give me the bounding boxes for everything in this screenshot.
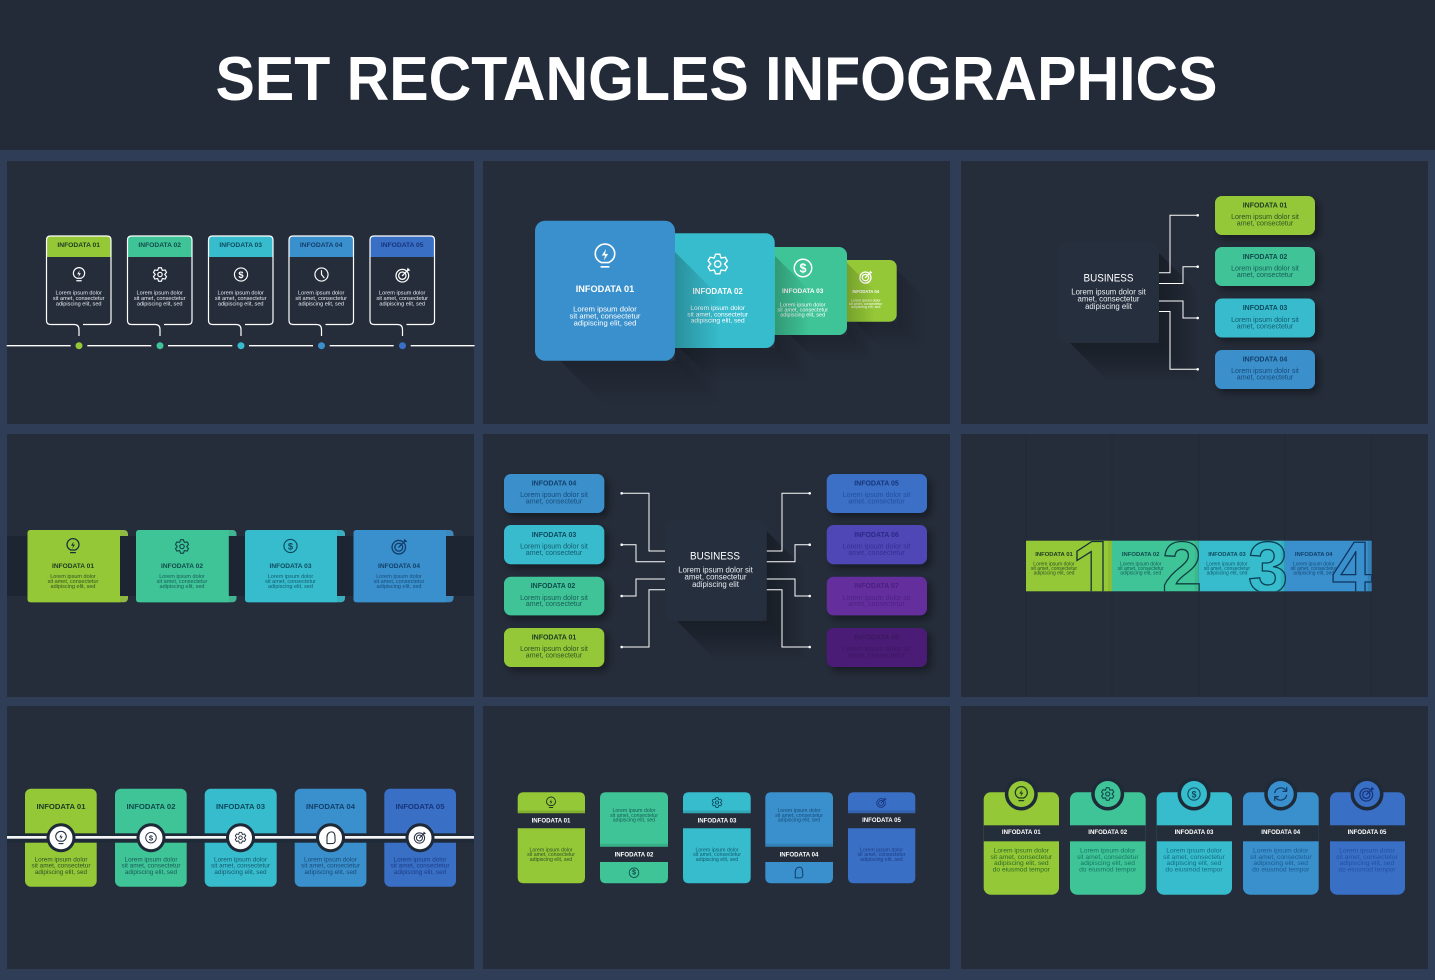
item 04 [504, 474, 604, 513]
square 04: adipiscing elit, sed [851, 305, 880, 309]
square 03: INFODATA 03 [782, 288, 824, 295]
item 06 [827, 525, 927, 564]
segment 3: INFODATA 03 [1208, 552, 1246, 558]
card 03: sit amet, consectetur [215, 296, 267, 302]
item 03: INFODATA 03 [532, 532, 576, 539]
item 01: INFODATA 01 [1243, 202, 1287, 210]
shadow of business box [1070, 253, 1199, 383]
card 04: adipiscing elit, sed [304, 869, 357, 876]
square 03: Lorem ipsum dolor [780, 303, 826, 309]
square 04: INFODATA 04 [852, 289, 880, 294]
card 05 [384, 789, 456, 887]
shadow of teal square [791, 263, 870, 342]
card 02 [1070, 778, 1146, 895]
square 04 [847, 260, 897, 322]
card 03: Lorem ipsum dolor [214, 856, 268, 864]
outlined numerals [1076, 540, 1372, 592]
card 01 [46, 236, 111, 349]
card 02: INFODATA 02 [161, 563, 203, 570]
card 01 [518, 792, 585, 883]
segment 4 [1285, 541, 1372, 591]
item 01 [1215, 196, 1315, 235]
card 03: sit amet, consectetur [693, 852, 741, 858]
card 03: sit amet, consectetur [265, 579, 316, 585]
segment 2: sit amet, consectetur [1118, 566, 1164, 572]
card 01: adipiscing elit, sed [994, 860, 1049, 867]
card 02 [136, 530, 238, 602]
card 04: adipiscing elit, sed [778, 818, 820, 824]
card 01 [28, 530, 129, 602]
item 04: amet, consectetur [526, 498, 583, 506]
shadow of cyan square [682, 256, 804, 359]
business box: Lorem ipsum dolor sit [678, 566, 754, 574]
segment 3: Lorem ipsum dolor [1206, 561, 1248, 567]
item 05 [827, 474, 927, 513]
card 03: Lorem ipsum dolor [268, 574, 313, 580]
square 03: adipiscing elit, sed [780, 313, 825, 319]
card 01: Lorem ipsum dolor [530, 848, 573, 854]
panel: descending stacked squares [483, 161, 950, 424]
business box: Lorem ipsum dolor sit [1071, 288, 1147, 296]
card 03: INFODATA 03 [1175, 829, 1214, 836]
card 02: adipiscing elit, sed [137, 301, 183, 307]
card 02: do eiusmod tempor [1079, 866, 1137, 874]
square 04: Lorem ipsum dolor [851, 298, 881, 302]
square 02: INFODATA 02 [693, 287, 743, 296]
shadow of business box [677, 531, 807, 661]
card 04: do eiusmod tempor [1252, 866, 1310, 874]
card 03: adipiscing elit, sed [696, 857, 738, 863]
card 05 [848, 792, 915, 883]
square 04: sit amet, consectetur [849, 302, 883, 306]
card 02: sit amet, consectetur [122, 862, 181, 870]
item 02: amet, consectetur [526, 600, 583, 608]
card 03: adipiscing elit, sed [268, 584, 313, 590]
segment 2: Lorem ipsum dolor [1120, 561, 1162, 567]
card 01: Lorem ipsum dolor [35, 856, 88, 864]
segment 1: sit amet, consectetur [1031, 566, 1077, 572]
segment 2: adipiscing elit, sed [1120, 571, 1161, 577]
square 03: sit amet, consectetur [777, 308, 828, 314]
card 01: Lorem ipsum dolor [56, 291, 102, 297]
item 02 [504, 577, 604, 615]
item 07: amet, consectetur [848, 600, 905, 608]
shadow of blue square [560, 252, 714, 378]
item 05: amet, consectetur [848, 498, 905, 506]
card 05: sit amet, consectetur [391, 862, 450, 870]
outlined numerals: 3 [1248, 528, 1288, 608]
panel: numbered strip [961, 434, 1428, 697]
card 02: Lorem ipsum dolor [159, 574, 205, 580]
card 04: sit amet, consectetur [775, 813, 823, 819]
panel: folded cards on band [7, 434, 474, 697]
square 01: adipiscing elit, sed [574, 318, 636, 328]
card 05: sit amet, consectetur [1336, 854, 1399, 861]
business box: amet, consectetur [1078, 294, 1140, 304]
title banner [0, 0, 1435, 150]
card 03: do eiusmod tempor [1165, 866, 1223, 874]
panel: business tree with eight items [483, 434, 950, 697]
card 02: INFODATA 02 [615, 852, 654, 858]
segment 4: Lorem ipsum dolor [1293, 561, 1335, 567]
item 05: Lorem ipsum dolor sit [843, 491, 910, 499]
item 01 [504, 628, 604, 667]
card 05: adipiscing elit, sed [379, 301, 425, 307]
title: SET RECTANGLES INFOGRAPHICS [216, 45, 1218, 114]
card 01: sit amet, consectetur [53, 296, 105, 302]
dark band [7, 536, 474, 596]
card 02 [128, 236, 192, 349]
item 02: amet, consectetur [1237, 271, 1294, 279]
card 04: INFODATA 04 [780, 852, 819, 858]
card 01: INFODATA 01 [37, 802, 86, 811]
card 01: adipiscing elit, sed [530, 857, 572, 863]
item 06: Lorem ipsum dolor sit [843, 542, 910, 550]
card 02: Lorem ipsum dolor [613, 808, 656, 814]
card 02: Lorem ipsum dolor [125, 856, 178, 864]
card 03 [245, 530, 346, 602]
card 01: sit amet, consectetur [527, 852, 575, 858]
item 01: INFODATA 01 [532, 634, 576, 642]
card 04 [295, 789, 366, 887]
business box: adipiscing elit [692, 580, 740, 589]
item 04: INFODATA 04 [1243, 356, 1287, 364]
item 03: INFODATA 03 [1243, 305, 1287, 312]
segment 4: adipiscing elit, sed [1293, 571, 1334, 577]
item 03: amet, consectetur [526, 549, 583, 557]
card 02: adipiscing elit, sed [125, 869, 178, 876]
card 03 [205, 789, 277, 887]
card 05: INFODATA 05 [862, 817, 902, 824]
dark band and white line [7, 833, 474, 843]
square 03 [774, 247, 847, 335]
square 01 [535, 221, 675, 361]
item 06: amet, consectetur [848, 549, 905, 557]
card 04: sit amet, consectetur [374, 579, 425, 585]
card 01: adipiscing elit, sed [51, 584, 95, 590]
business box: adipiscing elit [1085, 302, 1133, 311]
card 02: adipiscing elit, sed [1080, 860, 1135, 867]
business box [665, 520, 767, 621]
item 03 [1215, 298, 1315, 338]
card 04: Lorem ipsum dolor [304, 856, 358, 864]
segment 1: adipiscing elit, sed [1034, 571, 1075, 577]
card 05: sit amet, consectetur [376, 296, 428, 302]
card 04: INFODATA 04 [306, 802, 356, 811]
card 04 [765, 792, 833, 883]
card 05 [1330, 778, 1405, 895]
card 05 [370, 236, 434, 349]
card 02: sit amet, consectetur [134, 296, 186, 302]
node 3 [226, 823, 255, 852]
item 06: INFODATA 06 [854, 532, 899, 539]
card 03 [1157, 778, 1232, 895]
card 05: Lorem ipsum dolor [860, 848, 903, 854]
business box: BUSINESS [1084, 272, 1134, 284]
card 05: sit amet, consectetur [858, 852, 906, 858]
card 02: Lorem ipsum dolor [137, 291, 183, 297]
card 03 [683, 792, 751, 883]
node 5 [406, 823, 434, 852]
item 08 [827, 628, 927, 667]
item 04 [1215, 350, 1315, 389]
card 01: do eiusmod tempor [993, 866, 1051, 874]
card 03: adipiscing elit, sed [1167, 860, 1222, 867]
segment 3: adipiscing elit, sed [1207, 571, 1248, 577]
shadow of green square [861, 270, 900, 324]
segment 2 [1112, 541, 1199, 591]
card 02: INFODATA 02 [127, 802, 175, 811]
segment 1: Lorem ipsum dolor [1033, 561, 1075, 567]
square 01: sit amet, consectetur [570, 312, 641, 320]
card 01 [984, 778, 1059, 895]
card 02: INFODATA 02 [1088, 829, 1128, 836]
card 02: sit amet, consectetur [610, 813, 658, 819]
card 01: Lorem ipsum dolor [50, 574, 96, 580]
card 03: Lorem ipsum dolor [1166, 848, 1222, 854]
card 04: INFODATA 04 [300, 242, 343, 249]
card 04: sit amet, consectetur [301, 862, 361, 870]
card 04: Lorem ipsum dolor [376, 574, 422, 580]
square 01: Lorem ipsum dolor [573, 304, 637, 314]
item 03: Lorem ipsum dolor sit [520, 542, 588, 550]
item 03: Lorem ipsum dolor sit [1231, 316, 1299, 324]
item 01: amet, consectetur [1237, 220, 1294, 228]
card 05: INFODATA 05 [1348, 829, 1387, 836]
panel: cards with round icon badges [961, 706, 1428, 969]
item 04: Lorem ipsum dolor sit [520, 491, 588, 499]
card 04 [289, 236, 354, 349]
item 02: Lorem ipsum dolor sit [520, 594, 588, 602]
card 02: INFODATA 02 [138, 242, 181, 249]
card 01: adipiscing elit, sed [56, 301, 102, 307]
item 03: amet, consectetur [1237, 322, 1294, 330]
card 02: adipiscing elit, sed [160, 584, 204, 590]
card 04: INFODATA 04 [378, 563, 420, 570]
card 03 [208, 236, 273, 349]
panel: cards crossed by line [7, 706, 474, 969]
card 03: INFODATA 03 [219, 242, 262, 249]
card 03: adipiscing elit, sed [218, 301, 264, 307]
card 04: Lorem ipsum dolor [778, 808, 821, 814]
square 01: INFODATA 01 [576, 284, 634, 294]
card 01 [25, 789, 97, 887]
item 01: Lorem ipsum dolor sit [520, 645, 588, 653]
outlined numerals: 2 [1162, 528, 1202, 608]
item 03 [504, 525, 604, 564]
square 02: Lorem ipsum dolor [690, 305, 746, 312]
card 03: Lorem ipsum dolor [218, 291, 264, 297]
card 01: sit amet, consectetur [48, 579, 99, 585]
card 05: INFODATA 05 [396, 802, 445, 811]
square 02 [675, 233, 775, 348]
card 01: INFODATA 01 [52, 563, 94, 570]
card 05: adipiscing elit, sed [860, 857, 903, 863]
card 02: sit amet, consectetur [157, 579, 208, 585]
card 04: adipiscing elit, sed [377, 584, 421, 590]
card 03: INFODATA 03 [216, 802, 265, 811]
card 03: adipiscing elit, sed [214, 869, 267, 876]
node 1 [46, 823, 76, 852]
panel: business tree with four items [961, 161, 1428, 424]
card 02: adipiscing elit, sed [613, 818, 655, 824]
panel: outlined cards on timeline [7, 161, 474, 424]
item 01: amet, consectetur [526, 652, 583, 660]
item 02: INFODATA 02 [531, 583, 575, 590]
item 04: Lorem ipsum dolor sit [1231, 367, 1299, 375]
connector lines [620, 492, 811, 648]
card 01: sit amet, consectetur [990, 854, 1053, 861]
segment 3: sit amet, consectetur [1204, 566, 1250, 572]
card 04: INFODATA 04 [1261, 829, 1301, 836]
card 05: Lorem ipsum dolor [379, 291, 425, 297]
card 01: sit amet, consectetur [32, 862, 91, 870]
card 02: Lorem ipsum dolor [1080, 848, 1136, 854]
card 05: do eiusmod tempor [1338, 866, 1396, 874]
card 04: sit amet, consectetur [1250, 854, 1312, 861]
card 04: Lorem ipsum dolor [298, 291, 344, 297]
item 07: Lorem ipsum dolor sit [843, 594, 910, 602]
panel: split cards [483, 706, 950, 969]
segment 1: INFODATA 01 [1035, 552, 1073, 558]
item 01: Lorem ipsum dolor sit [1231, 213, 1299, 221]
card 03: sit amet, consectetur [1163, 854, 1226, 861]
segment 4: INFODATA 04 [1295, 552, 1333, 558]
card 01: INFODATA 01 [57, 242, 100, 249]
node 2 [136, 823, 166, 852]
item 05: INFODATA 05 [854, 480, 899, 488]
card 02 [600, 792, 668, 883]
card 03: sit amet, consectetur [211, 862, 271, 870]
timeline [7, 345, 474, 347]
node 4 [316, 823, 345, 852]
item 04: INFODATA 04 [532, 480, 576, 488]
segment 2: INFODATA 02 [1122, 552, 1160, 558]
card 01: INFODATA 01 [532, 818, 571, 824]
item 08: amet, consectetur [848, 652, 905, 660]
card 04 [1243, 778, 1319, 895]
card 02 [115, 789, 187, 887]
card 04: adipiscing elit, sed [298, 301, 344, 307]
segment 4: sit amet, consectetur [1291, 566, 1337, 572]
square 02: adipiscing elit, sed [691, 318, 745, 324]
item 07: INFODATA 07 [854, 583, 899, 590]
segment 1 [1026, 541, 1112, 591]
square 02: sit amet, consectetur [687, 312, 749, 318]
card 03: INFODATA 03 [698, 818, 737, 824]
item 07 [827, 577, 927, 615]
card 04: sit amet, consectetur [295, 296, 347, 302]
card 01: Lorem ipsum dolor [994, 848, 1050, 854]
business box: BUSINESS [690, 550, 740, 562]
card 01: adipiscing elit, sed [35, 869, 88, 876]
business box: amet, consectetur [685, 572, 747, 582]
connector lines [1159, 214, 1199, 371]
segment 3 [1199, 541, 1285, 591]
item 08: Lorem ipsum dolor sit [843, 645, 910, 653]
card 04 [354, 530, 455, 602]
item 08: INFODATA 08 [854, 634, 899, 642]
item 02: INFODATA 02 [1243, 254, 1287, 261]
card 03: Lorem ipsum dolor [696, 848, 739, 854]
card 03: INFODATA 03 [269, 563, 312, 570]
business box [1058, 242, 1159, 343]
item 02: Lorem ipsum dolor sit [1231, 264, 1299, 272]
card 05: INFODATA 05 [381, 242, 424, 249]
outlined numerals: 1 [1071, 524, 1119, 620]
card 05: Lorem ipsum dolor [1339, 848, 1395, 854]
card 05: adipiscing elit, sed [1340, 860, 1395, 867]
item 02 [1215, 247, 1315, 286]
card 04: adipiscing elit, sed [1253, 860, 1308, 867]
card 02: sit amet, consectetur [1077, 854, 1139, 861]
card 01: INFODATA 01 [1002, 829, 1041, 836]
card 04: Lorem ipsum dolor [1253, 848, 1309, 854]
card 05: Lorem ipsum dolor [394, 856, 447, 864]
item 04: amet, consectetur [1237, 374, 1294, 382]
outlined numerals: 4 [1332, 528, 1372, 608]
card 05: adipiscing elit, sed [394, 869, 447, 876]
